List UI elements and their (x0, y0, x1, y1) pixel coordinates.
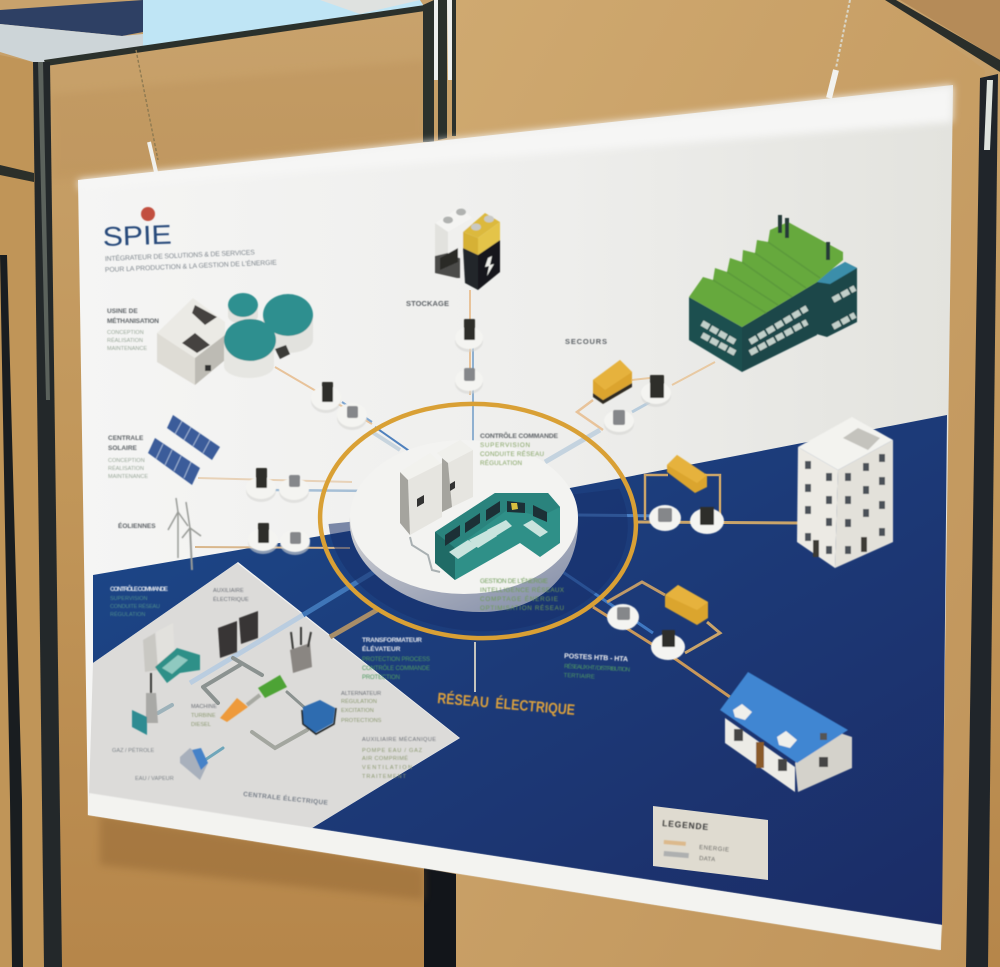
plant control desk (155, 648, 200, 683)
navy background zone (93, 415, 947, 925)
label: contrôle commande, plant: RÉGULATION (110, 611, 145, 618)
turbine cone (220, 698, 248, 722)
label: contrôle commande, plant: CONTRÔLE COMMANDE (110, 584, 168, 593)
label: contrôle commande (480, 431, 558, 467)
label: alternateur: EXCITATION (341, 708, 374, 714)
legend panel (653, 806, 768, 880)
label: postes HTB HTA: POSTES HTB - HTA (564, 653, 628, 663)
label: usine de méthanisation: USINE DE (107, 308, 138, 315)
top roller (78, 85, 953, 190)
ceiling and window (0, 0, 425, 62)
label: contrôle commande: CONDUITE RÉSEAU (480, 449, 544, 458)
label: gestion de l'énergie (480, 576, 565, 612)
label: usine de méthanisation: CONCEPTION (107, 330, 144, 336)
heat exchanger (180, 748, 208, 780)
label: transformateur élévateur: PROTECTION (362, 675, 400, 681)
poster shadow on wood (100, 815, 424, 900)
control cabinets (400, 440, 473, 572)
label: stockage: STOCKAGE (406, 299, 449, 308)
connection lines (158, 290, 800, 760)
tagline: INTÉGRATEUR DE SOLUTIONS & DE SERVICES (105, 247, 255, 263)
solar power plant (148, 415, 220, 485)
ring: réseau électrique (314, 396, 642, 646)
label: auxiliaire mécanique: TRAITEMENT (362, 774, 407, 780)
factory (689, 215, 857, 372)
label: ressources turbine: TURBINE (191, 713, 216, 719)
backup generators (593, 360, 708, 625)
label: centrale solaire: MAINTENANCE (108, 474, 148, 480)
poster sheet (78, 85, 953, 950)
label: ressources turbine: DIESEL (191, 722, 211, 728)
wind turbines (168, 498, 201, 570)
label: réseau électrique: RÉSEAU ÉLECTRIQUE (437, 690, 576, 719)
label: contrôle commande: CONTRÔLE COMMANDE (480, 431, 558, 440)
label: centrale solaire (108, 435, 148, 480)
methanisation plant (157, 293, 313, 385)
tagline (105, 247, 277, 274)
plant control cabinets (143, 623, 175, 672)
SPIE logo (102, 207, 172, 252)
label: postes HTB HTA (563, 653, 630, 682)
label: centrale solaire: SOLAIRE (108, 445, 138, 452)
label: contrôle commande: RÉGULATION (480, 458, 522, 467)
label: postes HTB HTA: RÉSEAUX HT / DISTRIBUTION (564, 663, 630, 673)
label: usine de méthanisation: MAINTENANCE (107, 346, 147, 352)
label: auxiliaire mécanique: POMPE EAU / GAZ (362, 748, 423, 754)
energy and data lines (190, 290, 800, 697)
label: gaz et pétrole: GAZ / PÉTROLE (112, 747, 155, 754)
label: alternateur: ALTERNATEUR (341, 691, 381, 697)
label: centrale solaire: RÉALISATION (108, 465, 144, 472)
label: gestion de l'énergie: OPTIMISATION RÉSEAU (480, 603, 564, 612)
label: éoliennes: ÉOLIENNES (118, 521, 156, 530)
label: auxiliaire mécanique: VENTILATION (362, 765, 412, 771)
central control disc (328, 440, 628, 631)
darker ring interior (328, 489, 628, 631)
network nodes (246, 319, 724, 660)
label: auxiliaire mécanique: AUXILIAIRE MÉCANIQUE (362, 736, 436, 743)
disc base (350, 517, 578, 612)
gas and fuel tower (132, 673, 158, 735)
SPIE logo: SPIE (102, 220, 172, 252)
label: auxiliaire électrique: ÉLECTRIQUE (213, 596, 249, 603)
bottom roller (88, 793, 942, 950)
label: alternateur (341, 691, 382, 724)
electrical cabinets (218, 611, 258, 658)
label: usine de méthanisation (107, 308, 159, 352)
label: gestion de l'énergie: INTELLIGENCE RÉSEAUX (480, 585, 565, 594)
mechanical auxiliary (302, 700, 336, 734)
power plant diamond (89, 563, 459, 828)
legend data key: DATA (699, 856, 715, 863)
label: gestion de l'énergie: GESTION DE L'ÉNERGIE (480, 576, 548, 585)
label: contrôle commande, plant: SUPERVISION (110, 596, 148, 602)
label: secours: SECOURS (565, 337, 607, 346)
label: transformateur élévateur (362, 637, 430, 681)
label: contrôle commande: SUPERVISION (480, 442, 530, 449)
label: usine de méthanisation: RÉALISATION (107, 337, 143, 344)
disc top (350, 440, 578, 594)
step-up transformer (290, 627, 312, 673)
label: contrôle commande, plant: CONDUITE RÉSEAU (110, 603, 160, 610)
label: transformateur élévateur: ÉLÉVATEUR (362, 644, 401, 653)
label: auxiliaire électrique: AUXILIAIRE (213, 588, 244, 594)
legend heading: LEGENDE (662, 818, 709, 832)
control desk (435, 493, 560, 580)
label: alternateur: PROTECTIONS (341, 718, 382, 724)
plant equipment (132, 611, 336, 780)
label: ressources turbine (191, 704, 217, 728)
plant piping (158, 658, 307, 760)
label: contrôle commande, plant (110, 584, 168, 618)
label: usine de méthanisation: MÉTHANISATION (107, 316, 159, 325)
label: gestion de l'énergie: COMPTAGE ÉNERGIE (480, 594, 558, 603)
label: transformateur élévateur: PROTECTION PROCESS (362, 657, 430, 663)
alternator (258, 675, 287, 698)
label: transformateur élévateur: TRANSFORMATEUR (362, 637, 422, 644)
storage batteries (435, 207, 500, 290)
label: centrale électrique: CENTRALE ÉLECTRIQUE (243, 789, 329, 807)
tagline: POUR LA PRODUCTION & LA GESTION DE L'ÉNERGIE (105, 257, 277, 274)
legend energy key: ENERGIE (699, 845, 729, 854)
label: ressources turbine: MACHINE (191, 704, 217, 710)
label: centrale solaire: CONCEPTION (108, 458, 145, 464)
label: alternateur: RÉGULATION (341, 698, 377, 705)
label: postes HTB HTA: TERTIAIRE (563, 673, 595, 681)
office building (797, 417, 893, 568)
label: transformateur élévateur: CONTRÔLE COMMANDE (362, 665, 430, 672)
label: eau et vapeur: EAU / VAPEUR (135, 776, 174, 782)
label: auxiliaire électrique (213, 588, 249, 603)
hanging chains (136, 0, 850, 172)
label: centrale solaire: CENTRALE (108, 435, 144, 442)
house (720, 672, 852, 792)
label: auxiliaire mécanique: AIR COMPRIMÉ (362, 755, 408, 762)
poster (78, 85, 953, 950)
label: auxiliaire mécanique (362, 736, 436, 780)
